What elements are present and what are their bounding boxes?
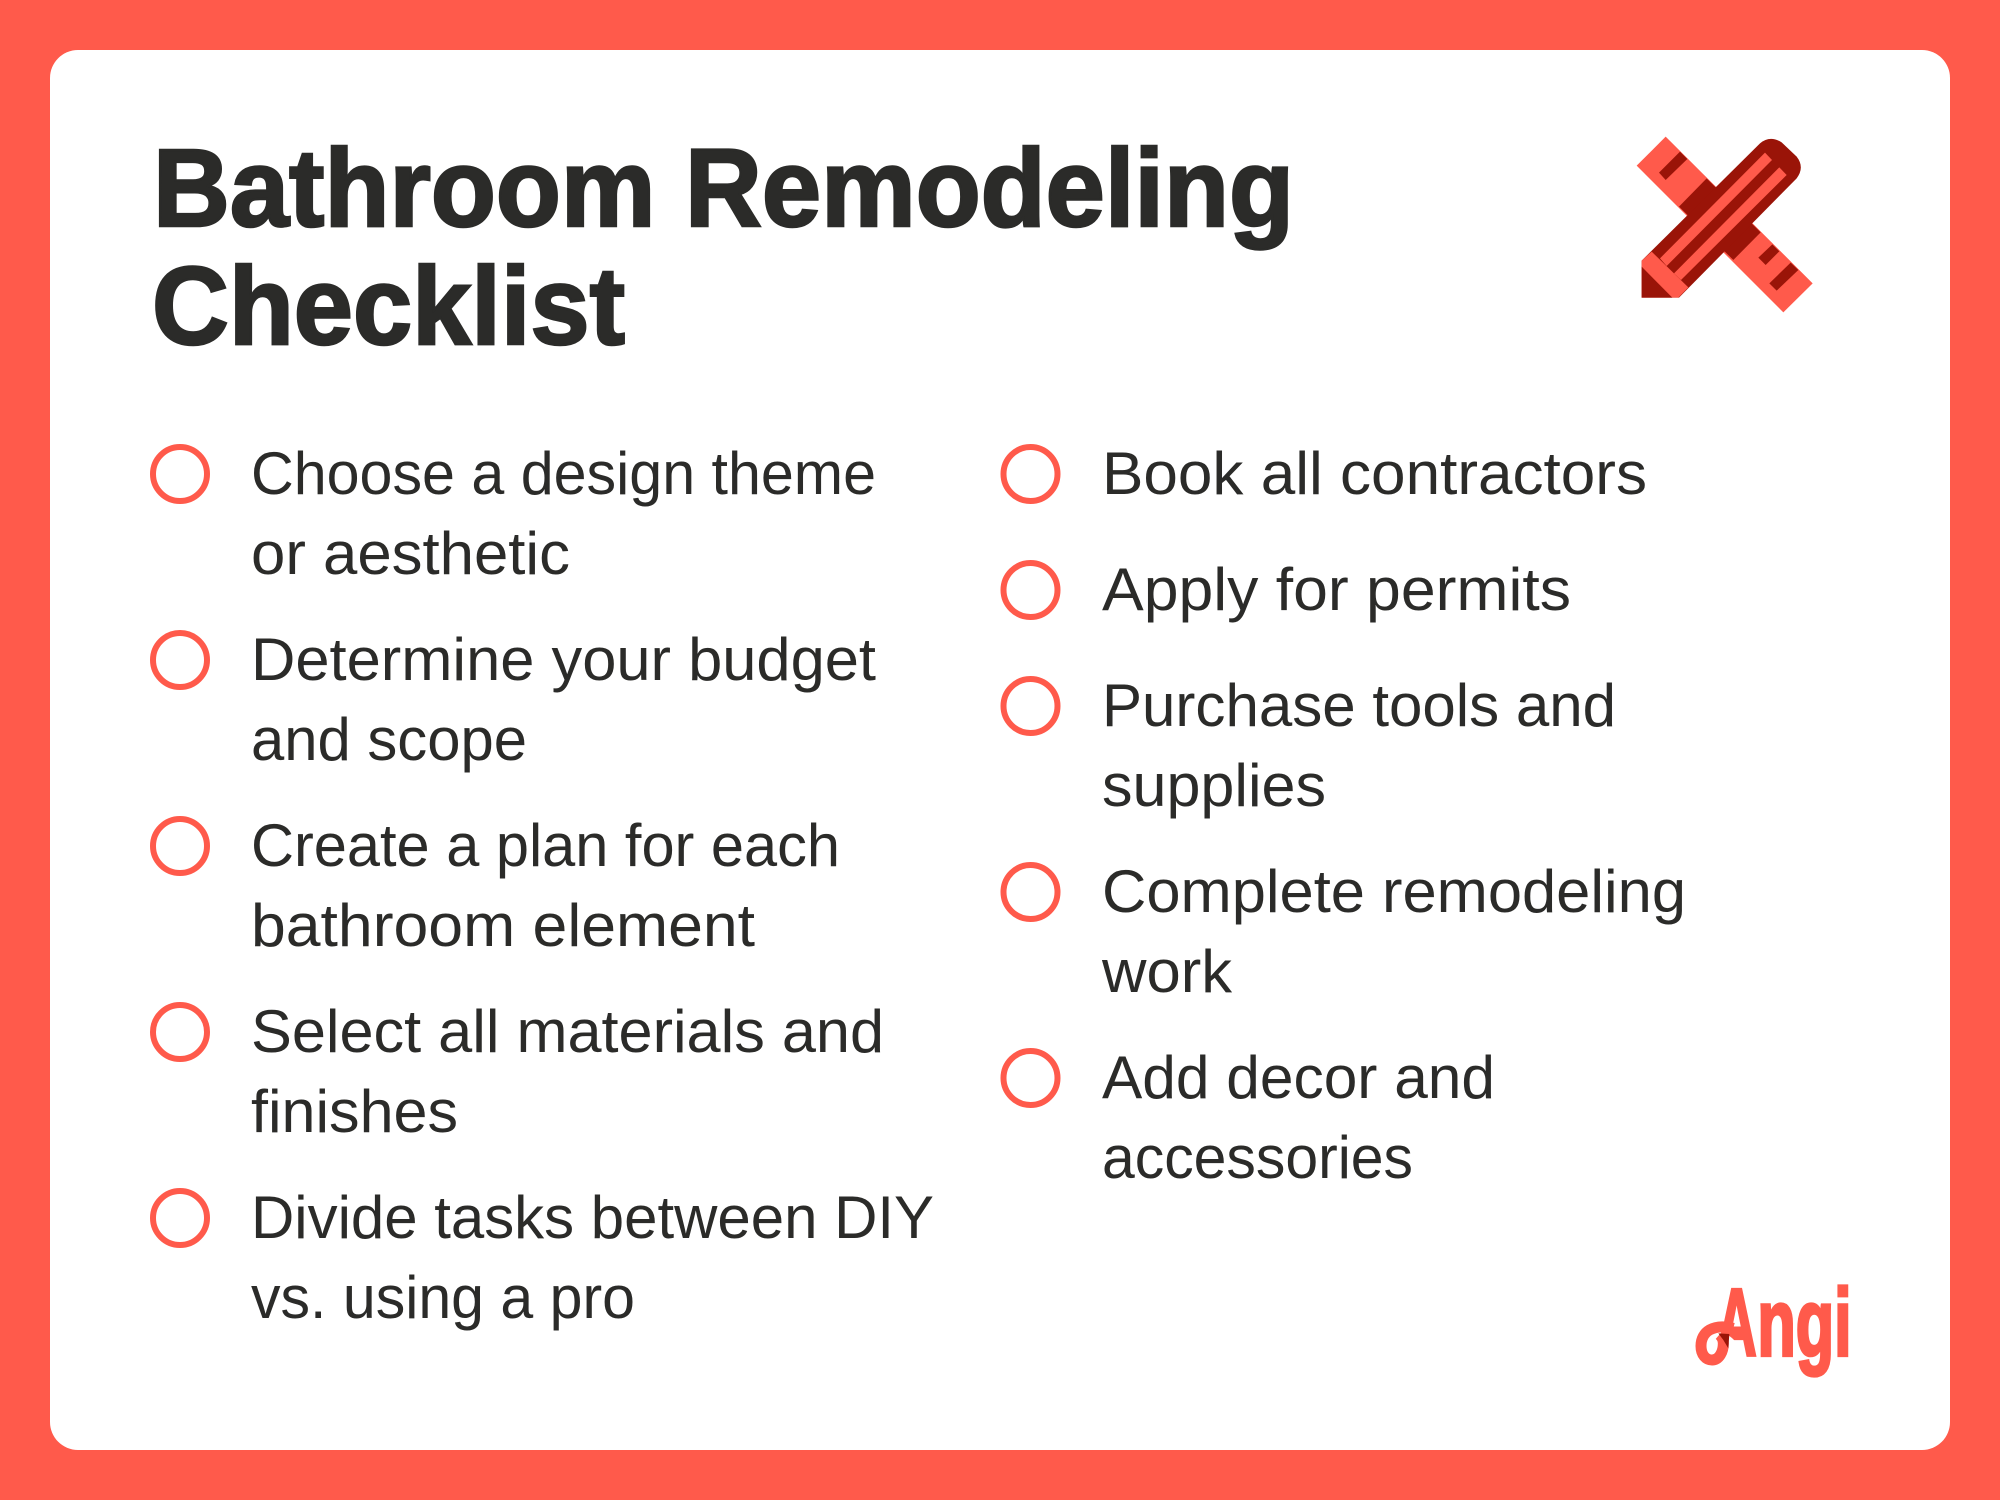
item: materials and finishes: Select all materials and bbox=[251, 998, 884, 1065]
icon: crossed ruler and pencil bbox=[1637, 137, 1813, 312]
item: decor and accessories: Add decor and bbox=[1102, 1044, 1495, 1111]
item: materials and finishes: finishes bbox=[251, 1078, 458, 1145]
item: tools and supplies: supplies bbox=[1102, 752, 1326, 819]
item: tools and supplies: Purchase tools and bbox=[1102, 672, 1616, 739]
checklist column: right bbox=[1004, 440, 1686, 1191]
item: budget and scope: Determine your budget bbox=[251, 626, 876, 693]
item: tools and supplies bbox=[1004, 672, 1616, 819]
item: remodeling work: work bbox=[1101, 938, 1233, 1005]
item: plan for each element: Create a plan for each bbox=[251, 812, 840, 879]
logo: Angi: ngi bbox=[1757, 1270, 1852, 1377]
item: budget and scope: and scope bbox=[251, 706, 527, 773]
title bbox=[152, 127, 1294, 368]
title: Bathroom Remodeling bbox=[153, 127, 1294, 250]
item: remodeling work: Complete remodeling bbox=[1102, 858, 1686, 925]
item: DIY vs pro bbox=[153, 1184, 934, 1331]
item: materials and finishes bbox=[153, 998, 884, 1145]
logo: Angi bbox=[1701, 1270, 1852, 1377]
item: permits: Apply for permits bbox=[1102, 556, 1571, 623]
logo: Angi: A bbox=[1717, 1270, 1757, 1377]
item: decor and accessories: accessories bbox=[1102, 1124, 1413, 1191]
item: plan for each element: bathroom element bbox=[251, 892, 755, 959]
item: plan for each element bbox=[153, 812, 840, 959]
item: DIY vs pro: vs. using a pro bbox=[251, 1264, 635, 1331]
item: contractors: Book all contractors bbox=[1102, 440, 1647, 507]
item: DIY vs pro: Divide tasks between DIY bbox=[251, 1184, 934, 1251]
item: budget and scope bbox=[153, 626, 876, 773]
checklist column: left bbox=[153, 440, 934, 1331]
item: design theme: Choose a design theme bbox=[251, 440, 876, 507]
item: design theme bbox=[153, 440, 876, 587]
item: remodeling work bbox=[1004, 858, 1686, 1005]
title: Checklist bbox=[152, 245, 625, 368]
item: decor and accessories bbox=[1004, 1044, 1495, 1191]
item: design theme: or aesthetic bbox=[251, 520, 570, 587]
